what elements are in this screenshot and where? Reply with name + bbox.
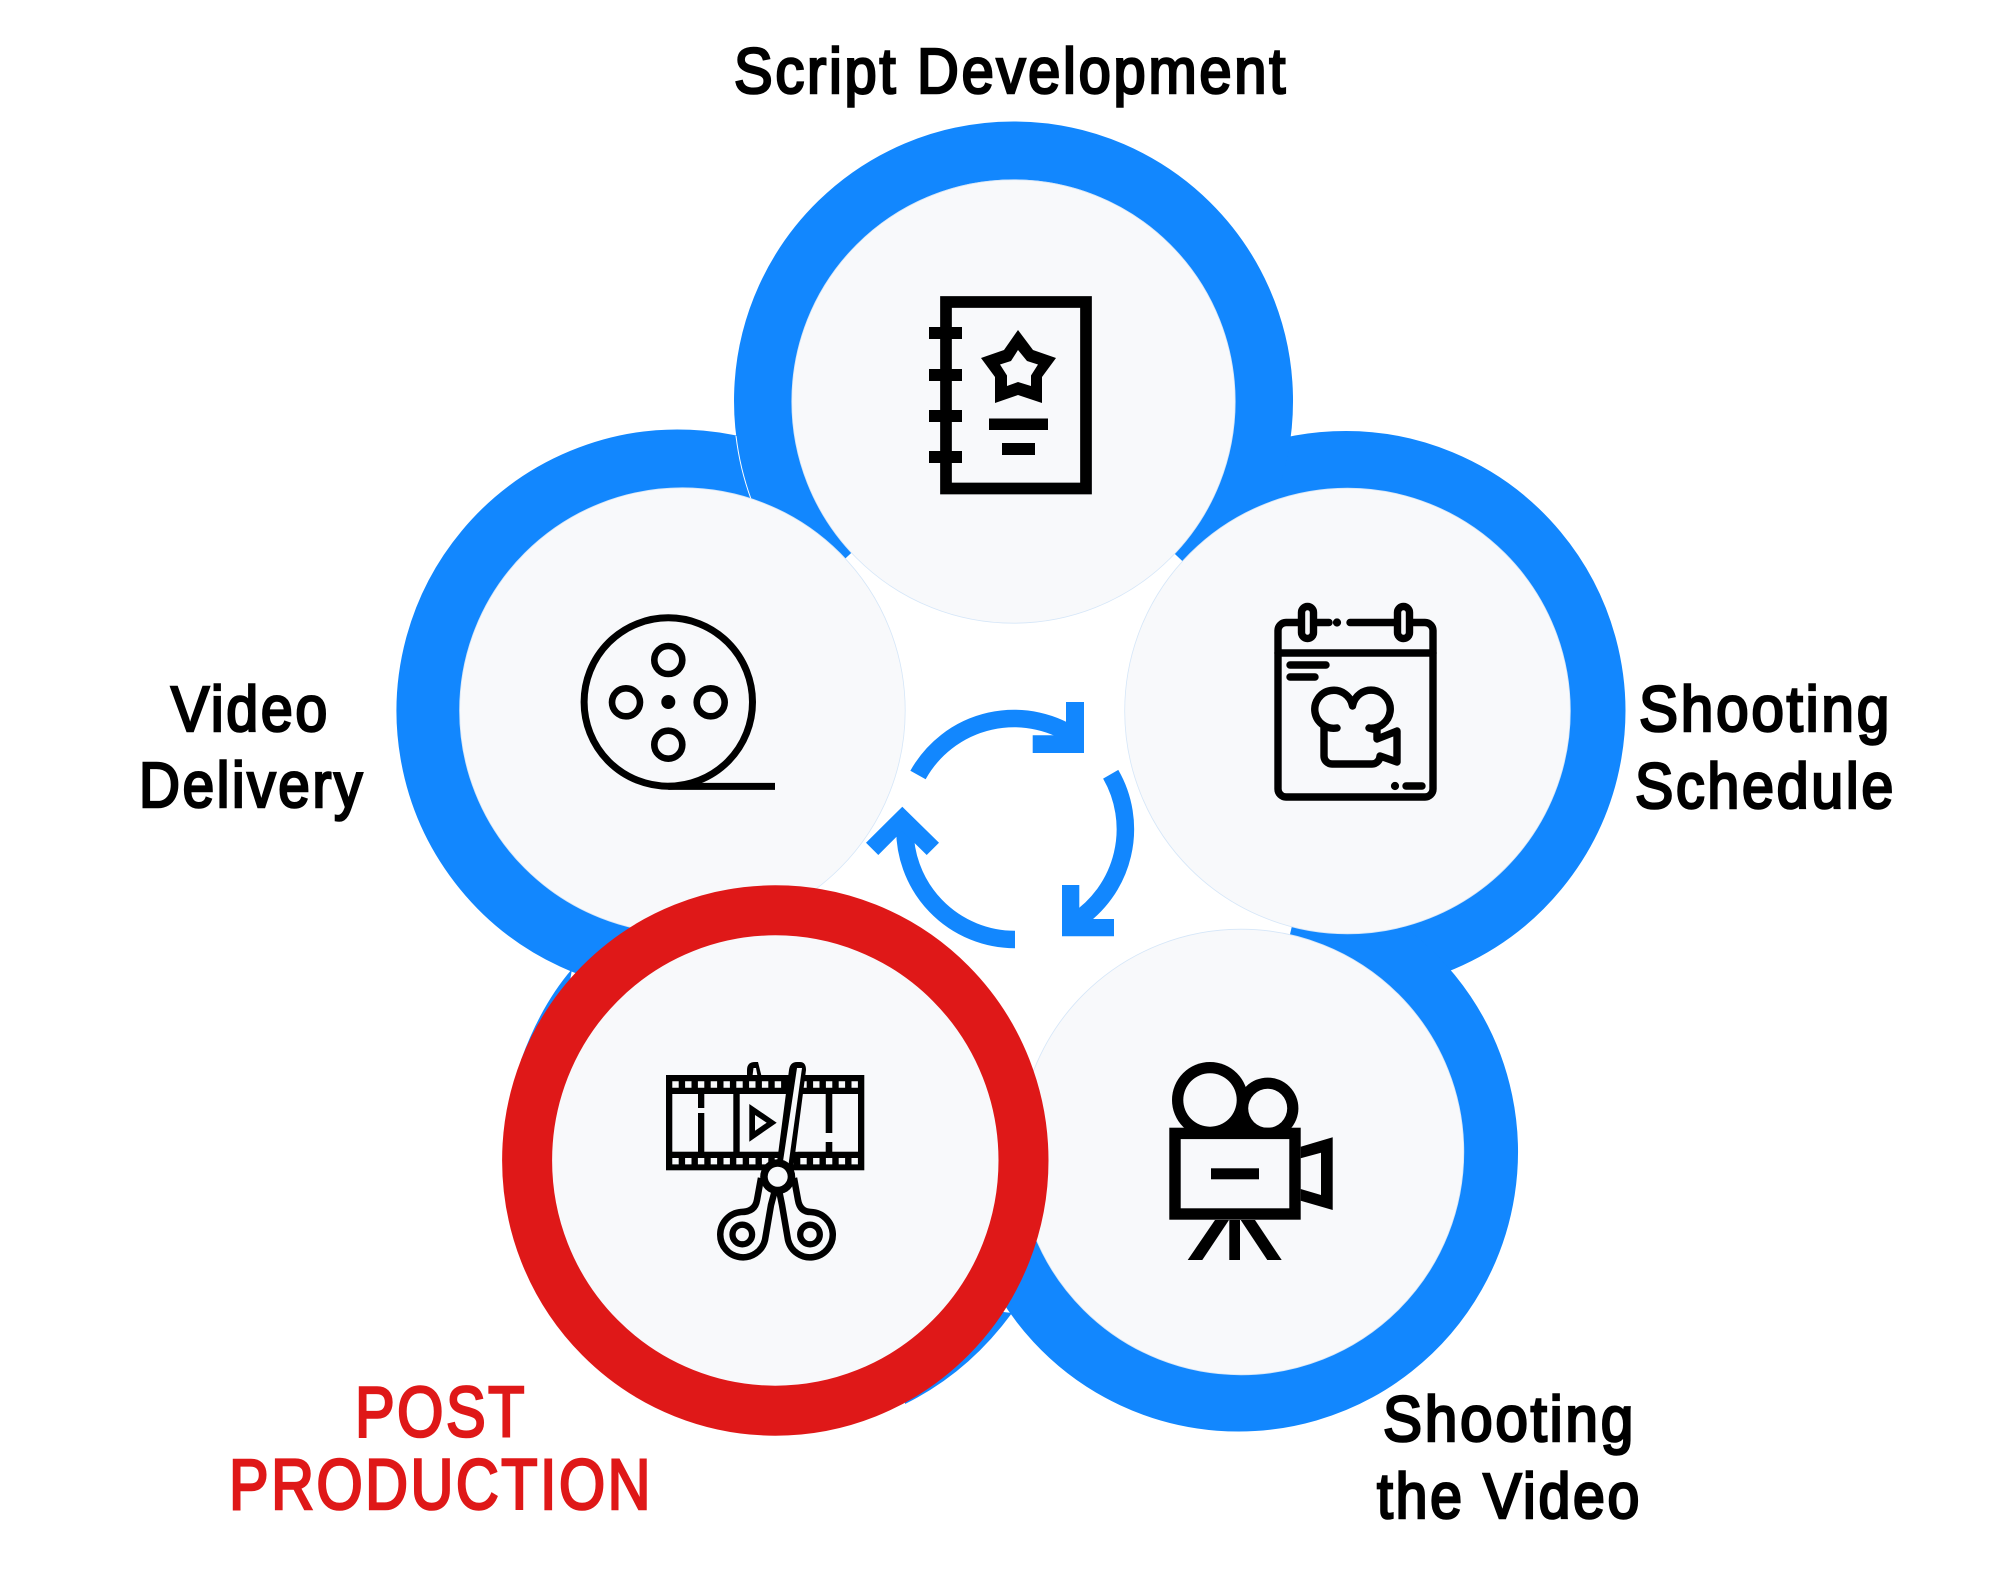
icon: film reel bbox=[584, 618, 775, 786]
blue slivers behind the red ring bbox=[521, 969, 1012, 1404]
label: video delivery bbox=[139, 673, 365, 821]
label: script development: Script Development bbox=[734, 35, 1288, 107]
panel: shooting schedule disc bbox=[1125, 488, 1570, 934]
panel: shooting the video disc bbox=[1018, 929, 1464, 1375]
label: shooting schedule: Schedule bbox=[1635, 750, 1896, 822]
panel: script development disc bbox=[792, 180, 1235, 623]
label: post production bbox=[229, 1374, 653, 1525]
panel: video delivery disc bbox=[460, 488, 905, 933]
label: shooting schedule: Shooting bbox=[1639, 673, 1892, 745]
icon: shooting schedule calendar bbox=[1278, 606, 1433, 797]
label: post production: PRODUCTION bbox=[229, 1446, 653, 1525]
label: shooting the video: the Video bbox=[1377, 1460, 1642, 1532]
label: video delivery: Delivery bbox=[139, 749, 365, 821]
icon: notebook with star bbox=[929, 302, 1086, 488]
label: shooting the video bbox=[1377, 1383, 1642, 1532]
blue ring segments bbox=[429, 150, 1595, 1401]
panel: post production highlighted disc bbox=[527, 910, 1024, 1411]
icon: film strip and scissors bbox=[666, 1062, 864, 1257]
icon: central cycle arrows bbox=[866, 702, 1125, 940]
label: shooting the video: Shooting bbox=[1383, 1383, 1636, 1455]
label: post production: POST bbox=[355, 1374, 527, 1452]
icon: movie camera on tripod bbox=[1172, 1062, 1333, 1260]
label: video delivery: Video bbox=[171, 673, 330, 745]
label: shooting schedule bbox=[1635, 673, 1896, 822]
